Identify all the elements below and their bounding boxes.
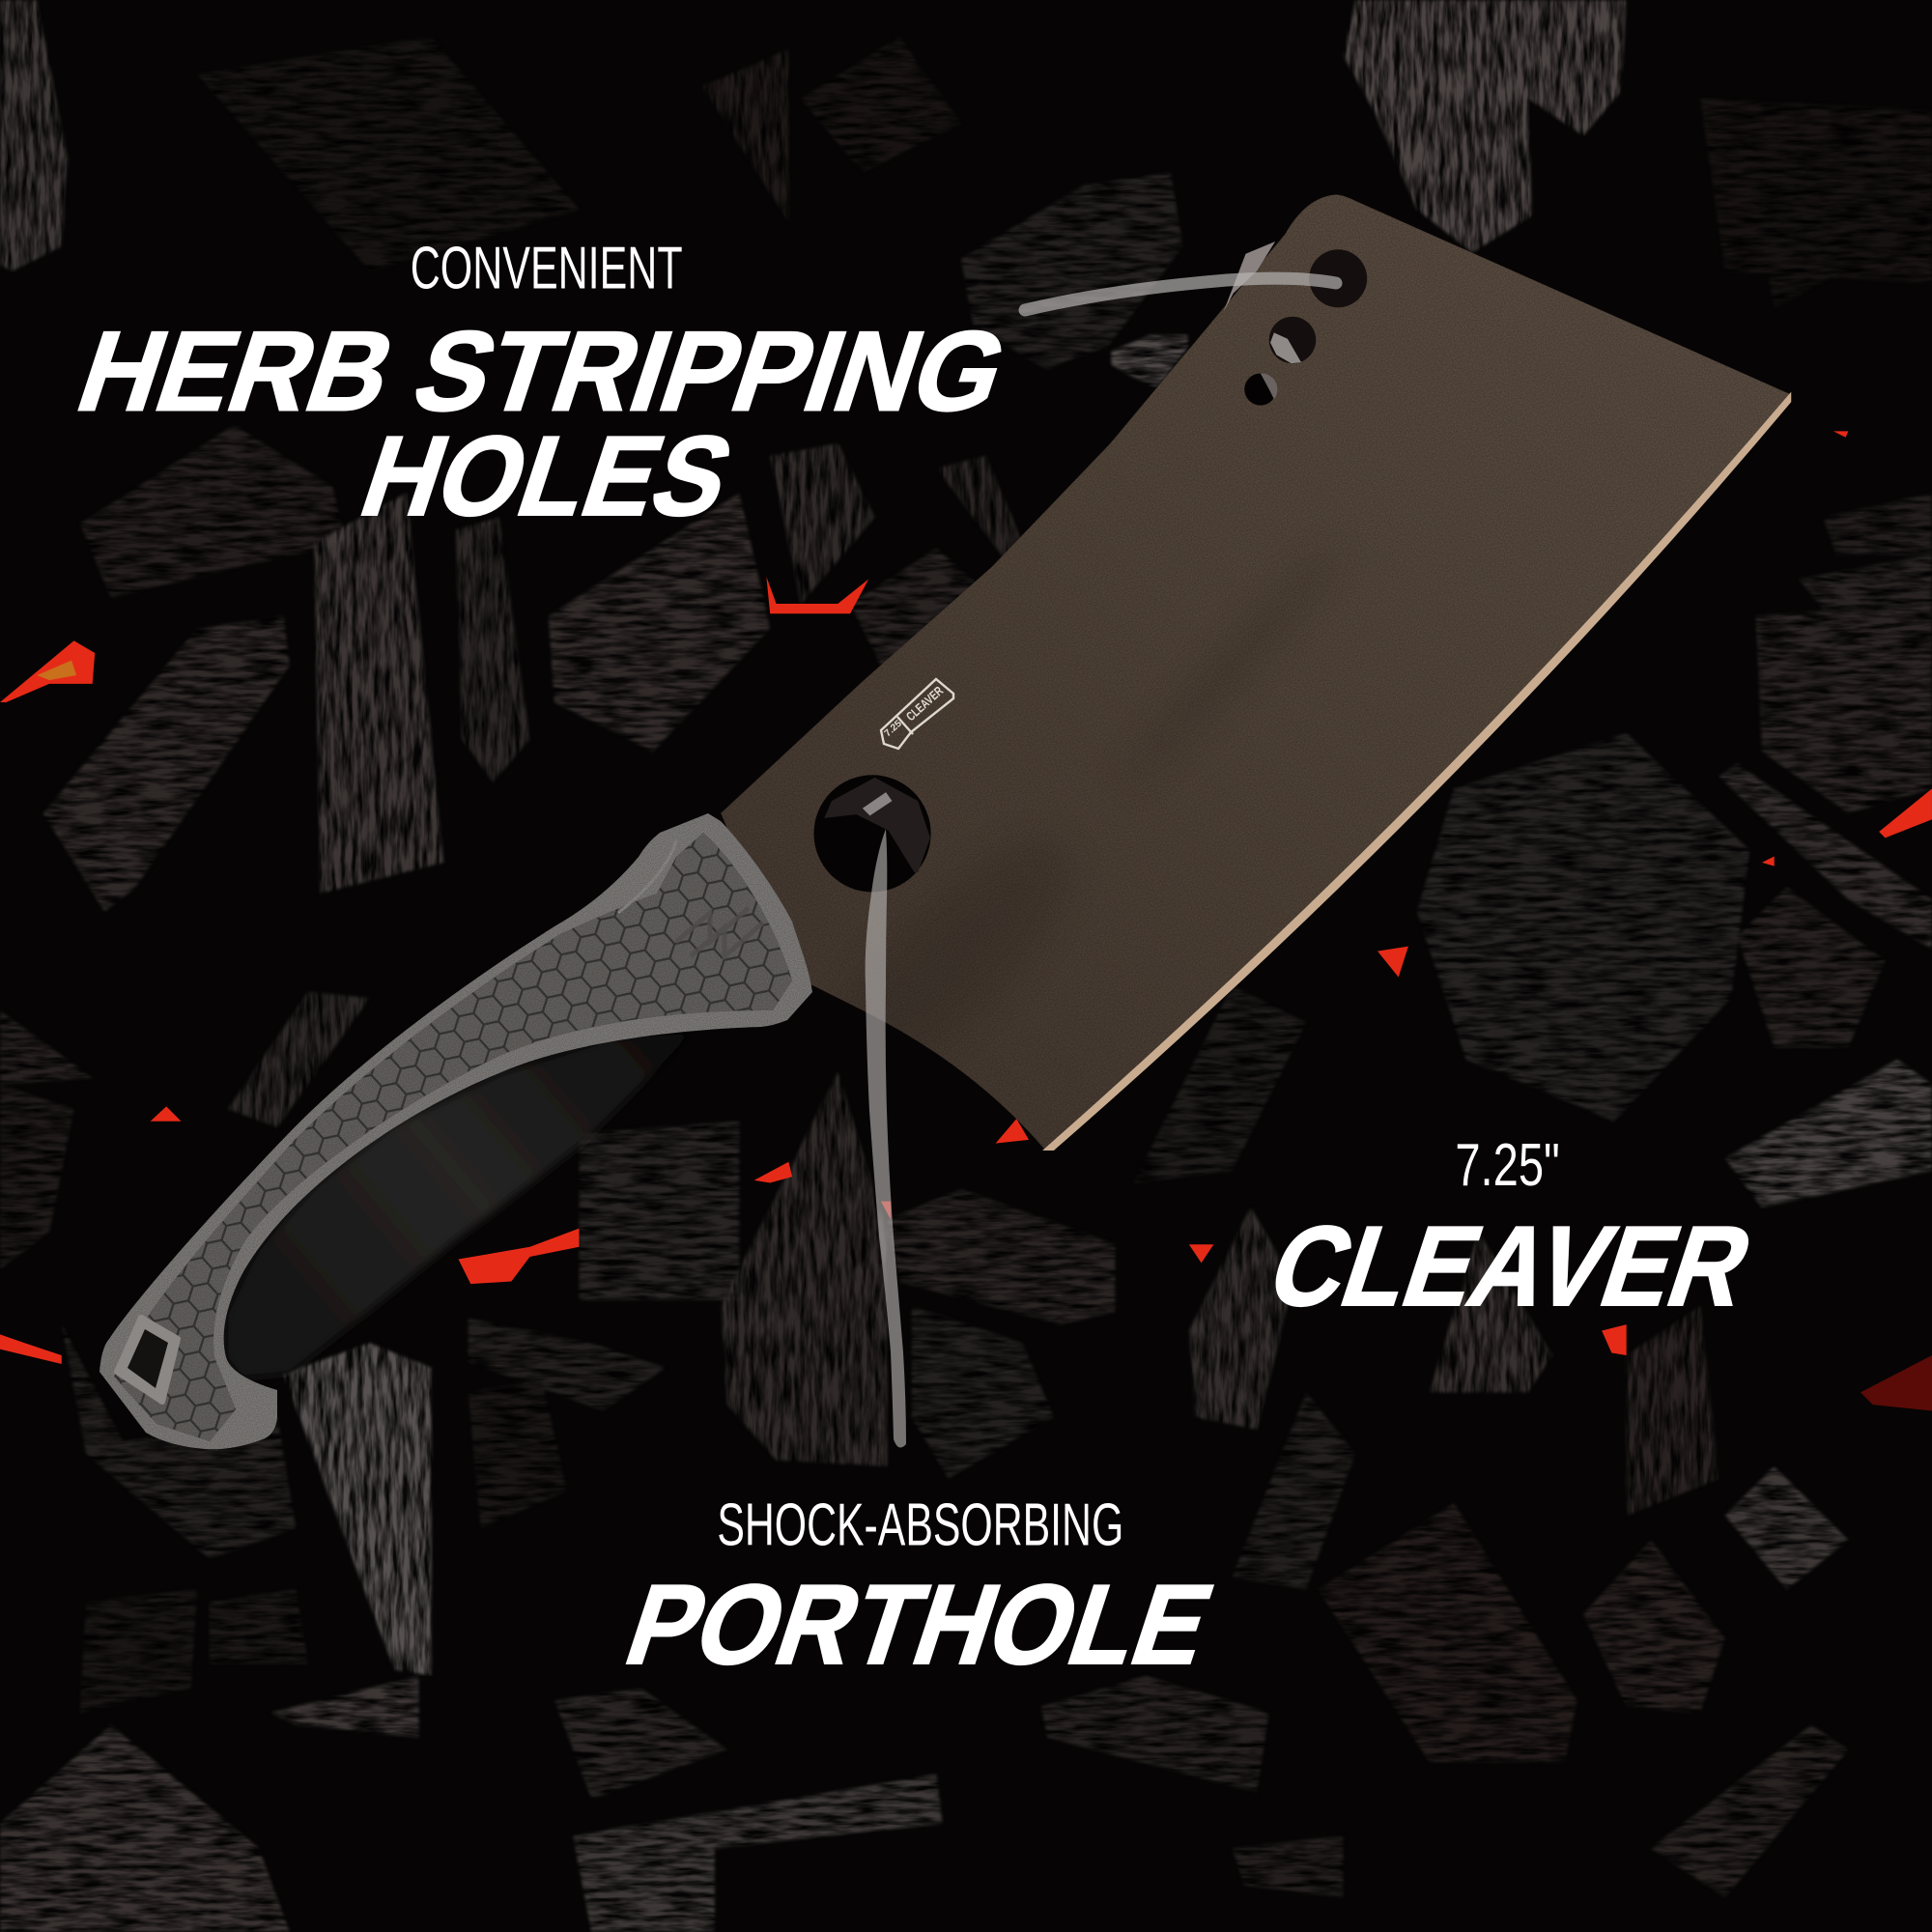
handle grip: [97, 811, 831, 1468]
callout text: cleaver: [1255, 1131, 1767, 1329]
blade stamp: 7.25: [883, 718, 904, 739]
callout text: cleaver: 7.25": [1455, 1131, 1560, 1199]
callout text: porthole: PORTHOLE: [611, 1561, 1227, 1688]
charcoal chunks with vertical grain: [0, 0, 1719, 1676]
porthole: [813, 775, 931, 892]
callout text: herb stripping holes: HOLES: [347, 412, 748, 539]
handle dark inner scale: [225, 1034, 690, 1378]
herb stripping holes: [1244, 249, 1367, 406]
lanyard hole: [117, 1318, 178, 1402]
handle logo: [676, 908, 763, 956]
callout text: herb stripping holes: [64, 234, 1023, 539]
callout text: porthole: [611, 1491, 1227, 1688]
callout text: porthole: SHOCK-ABSORBING: [717, 1491, 1123, 1558]
callout line: herb stripping holes: [1025, 278, 1336, 310]
blade: [721, 195, 1790, 1150]
callout text: herb stripping holes: HERB STRIPPING: [64, 308, 1023, 435]
glowing embers: [0, 431, 1932, 1410]
blade stamp: [881, 679, 953, 749]
callout text: herb stripping holes: CONVENIENT: [411, 234, 683, 301]
cleaver knife: [97, 195, 1790, 1468]
callout line: porthole: [866, 829, 906, 1448]
callout text: cleaver: CLEAVER: [1255, 1203, 1767, 1329]
blade stamp: CLEAVER: [903, 683, 947, 724]
